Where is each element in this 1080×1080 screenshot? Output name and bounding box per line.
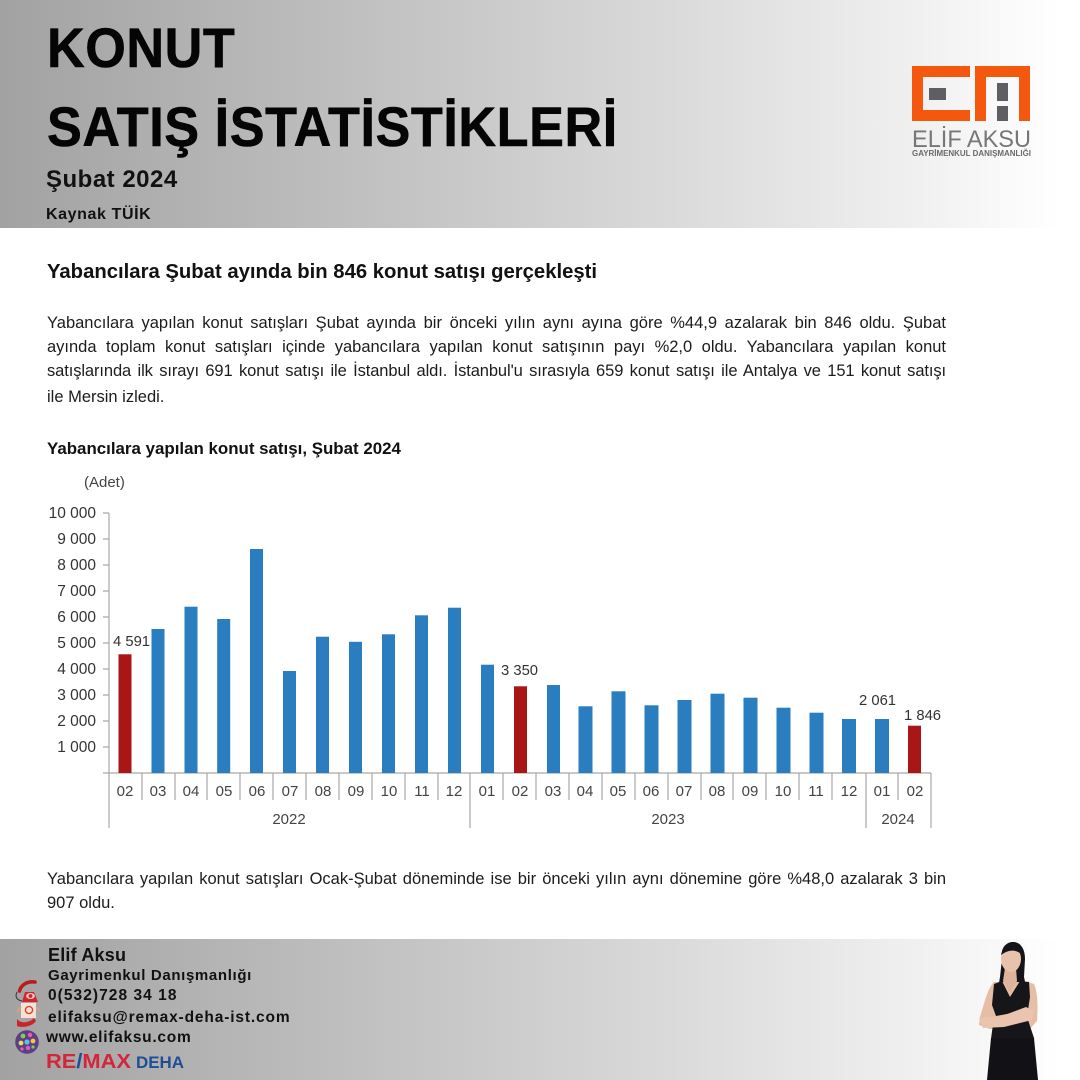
bars — [152, 549, 889, 773]
title: SATIŞ İSTATİSTİKLERİ — [47, 95, 618, 158]
upper arms — [979, 982, 1038, 1029]
closing paragraph: 907 oldu. — [47, 894, 115, 912]
bar chart — [49, 474, 941, 828]
folded forearms — [979, 1007, 1034, 1028]
month labels: 02 — [907, 783, 923, 800]
month labels: 12 — [446, 783, 462, 800]
month labels: 10 — [775, 783, 791, 800]
month labels: 04 — [577, 783, 593, 800]
portrait: agent — [979, 942, 1038, 1080]
y axis labels: 10 000 — [49, 505, 96, 522]
neck — [1003, 968, 1017, 993]
brand: RE/MAX DEHA: RE/MAX — [46, 1051, 132, 1073]
icon: globe — [15, 1030, 39, 1054]
year labels — [272, 811, 915, 828]
month labels: 11 — [414, 783, 430, 800]
month labels: 02 — [512, 783, 528, 800]
y axis labels: 6 000 — [57, 609, 96, 626]
brand: RE/MAX DEHA — [46, 1051, 184, 1073]
y axis labels — [49, 505, 96, 756]
y axis labels: 2 000 — [57, 713, 96, 730]
y axis labels: 5 000 — [57, 635, 96, 652]
y axis labels: 4 000 — [57, 661, 96, 678]
trousers — [987, 1038, 1038, 1080]
contact block — [15, 945, 290, 1073]
y axis labels: 8 000 — [57, 557, 96, 574]
logo: Elif Aksu: GAYRİMENKUL DANIŞMANLIĞI — [912, 149, 1031, 158]
month labels: 04 — [183, 783, 199, 800]
source line: Kaynak TÜİK — [46, 206, 151, 223]
year labels: 2022 — [272, 811, 306, 828]
y axis labels: 7 000 — [57, 583, 96, 600]
month labels: 08 — [315, 783, 331, 800]
name: Elif Aksu — [48, 945, 126, 965]
month labels: 03 — [545, 783, 561, 800]
icon: telephone — [16, 980, 38, 1002]
email: elifaksu@remax-deha-ist.com — [48, 1009, 290, 1026]
month labels: 12 — [841, 783, 857, 800]
logo: Elif Aksu — [912, 66, 1031, 158]
title — [47, 16, 618, 158]
value labels — [113, 634, 941, 724]
y axis labels: 1 000 — [57, 739, 96, 756]
month labels: 06 — [249, 783, 265, 800]
y axis labels: 9 000 — [57, 531, 96, 548]
highlighted February bars — [118, 654, 921, 773]
job title: Gayrimenkul Danışmanlığı — [48, 967, 252, 984]
month labels: 03 — [150, 783, 166, 800]
face — [1001, 946, 1021, 972]
month labels: 01 — [874, 783, 890, 800]
month labels: 09 — [348, 783, 364, 800]
value labels: 2 061 — [859, 693, 896, 709]
intro paragraph — [47, 314, 946, 406]
vest — [992, 981, 1030, 1016]
month labels: 01 — [479, 783, 495, 800]
month labels: 06 — [643, 783, 659, 800]
logo: Elif Aksu: ELİF AKSU — [912, 126, 1031, 153]
month labels: 10 — [381, 783, 397, 800]
month labels — [117, 783, 923, 800]
month labels: 11 — [808, 783, 824, 800]
month labels: 05 — [216, 783, 232, 800]
hair — [996, 942, 1027, 1001]
closing paragraph — [47, 870, 946, 912]
article heading: Yabancılara Şubat ayında bin 846 konut satışı gerçekleşti — [47, 261, 597, 283]
month labels: 08 — [709, 783, 725, 800]
year labels: 2024 — [881, 811, 915, 828]
month labels: 02 — [117, 783, 133, 800]
y axis labels: 3 000 — [57, 687, 96, 704]
year labels: 2023 — [651, 811, 685, 828]
title: KONUT — [47, 16, 235, 79]
header band — [0, 0, 1080, 228]
value labels: 3 350 — [501, 663, 538, 679]
brand: RE/MAX DEHA: DEHA — [136, 1053, 184, 1072]
month labels: 07 — [282, 783, 298, 800]
phone: 0(532)728 34 18 — [48, 987, 178, 1004]
website: www.elifaksu.com — [46, 1029, 191, 1046]
closing paragraph: Yabancılara yapılan konut satışları Ocak-Şubat döneminde ise bir önceki yılın aynı dönemine göre %48,0 azalarak 3 bin — [47, 870, 946, 888]
subtitle: date: Şubat 2024 — [46, 166, 178, 193]
footer band — [0, 939, 1080, 1080]
month labels: 05 — [610, 783, 626, 800]
icon: email — [17, 1003, 40, 1027]
intro paragraph: ayında toplam konut satışları içinde yabancılara yapılan konut satışının payı %2,0 oldu. Yabancılara yapılan konut — [47, 338, 946, 356]
month labels: 09 — [742, 783, 758, 800]
intro paragraph: ile Mersin izledi. — [47, 388, 164, 406]
chart title: Yabancılara yapılan konut satışı, Şubat 2024 — [47, 439, 401, 458]
unit label: (Adet) — [84, 474, 125, 491]
month labels: 07 — [676, 783, 692, 800]
intro paragraph: satışlarında ilk sırayı 691 konut satışı ile İstanbul aldı. İstanbul'u sırasıyla 659 konut satışı ile Antalya ve 151 konut satışı — [47, 362, 946, 380]
value labels: 1 846 — [904, 708, 941, 724]
intro paragraph: Yabancılara yapılan konut satışları Şubat ayında bir önceki yılın aynı ayına göre %44,9 azalarak bin 846 oldu. Şubat — [47, 314, 946, 332]
value labels: 4 591 — [113, 634, 150, 650]
